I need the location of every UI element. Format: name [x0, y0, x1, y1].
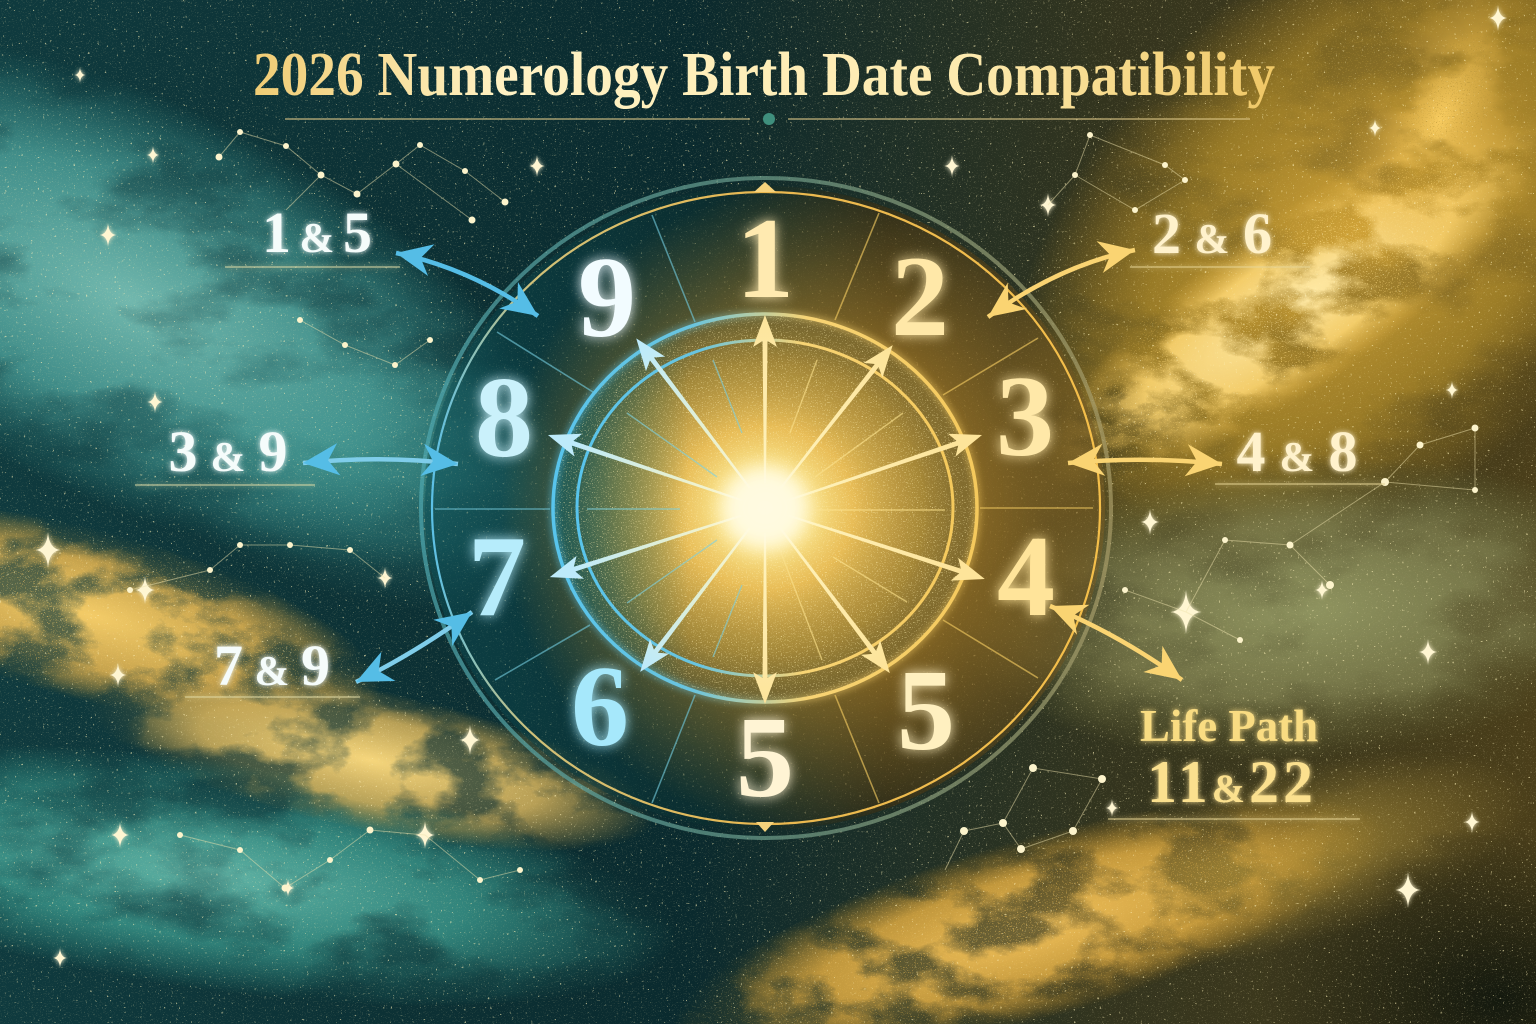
constellations [127, 129, 1478, 892]
wheel numbers: 8 [475, 354, 533, 482]
wheel disc [425, 186, 1105, 830]
spokes [544, 315, 989, 704]
wheel numbers: 4 [997, 513, 1055, 641]
wheel numbers [468, 195, 1055, 822]
wheel numbers: 3 [996, 353, 1054, 481]
numerology wheel [421, 178, 1111, 838]
wheel numbers: 1 [736, 195, 794, 323]
pair label: 3 & 9: 3 &9 [168, 419, 288, 484]
pair label: 2 & 6: 2 &6 [1152, 201, 1272, 266]
connector arrows [303, 250, 1222, 682]
arrow: 1 & 5 to 9 [396, 253, 538, 316]
wheel rings [421, 178, 1111, 838]
wheel numbers: 5 [897, 647, 955, 775]
arrow: Life Path to 4 [1050, 606, 1182, 680]
wheel dust [553, 314, 977, 702]
pair label: 1 & 5: 1&5 [262, 200, 372, 265]
arrow: 7 & 9 to 7 [356, 612, 472, 682]
central sun [721, 466, 809, 550]
pair label: 4 & 8: 4 &8 [1236, 419, 1358, 484]
amber glow behind ring [475, 190, 1095, 826]
ring markers [754, 182, 776, 832]
central glow [553, 314, 977, 702]
arrow: 2 & 6 to 2 [988, 250, 1135, 317]
wheel numbers: 9 [578, 234, 636, 362]
pair label: Life Path 11 & 22: Life Path [1140, 700, 1318, 751]
wheel numbers: 6 [571, 643, 629, 771]
wheel numbers: 5 [736, 694, 794, 822]
arrow: 3 & 9 to 8 [303, 459, 458, 464]
wheel numbers: 2 [891, 233, 949, 361]
teal shading on inner disc [553, 314, 977, 702]
pair label: 7 & 9: 7 &9 [214, 633, 330, 698]
pair label: Life Path 11 & 22 [1108, 700, 1360, 819]
title: 2026 Numerology Birth Date Compatibility [253, 41, 1275, 109]
arrow: 4 & 8 to 3 [1068, 460, 1222, 464]
pair label: Life Path 11 & 22: 11&22 [1147, 749, 1313, 815]
wheel numbers: 7 [468, 513, 526, 641]
